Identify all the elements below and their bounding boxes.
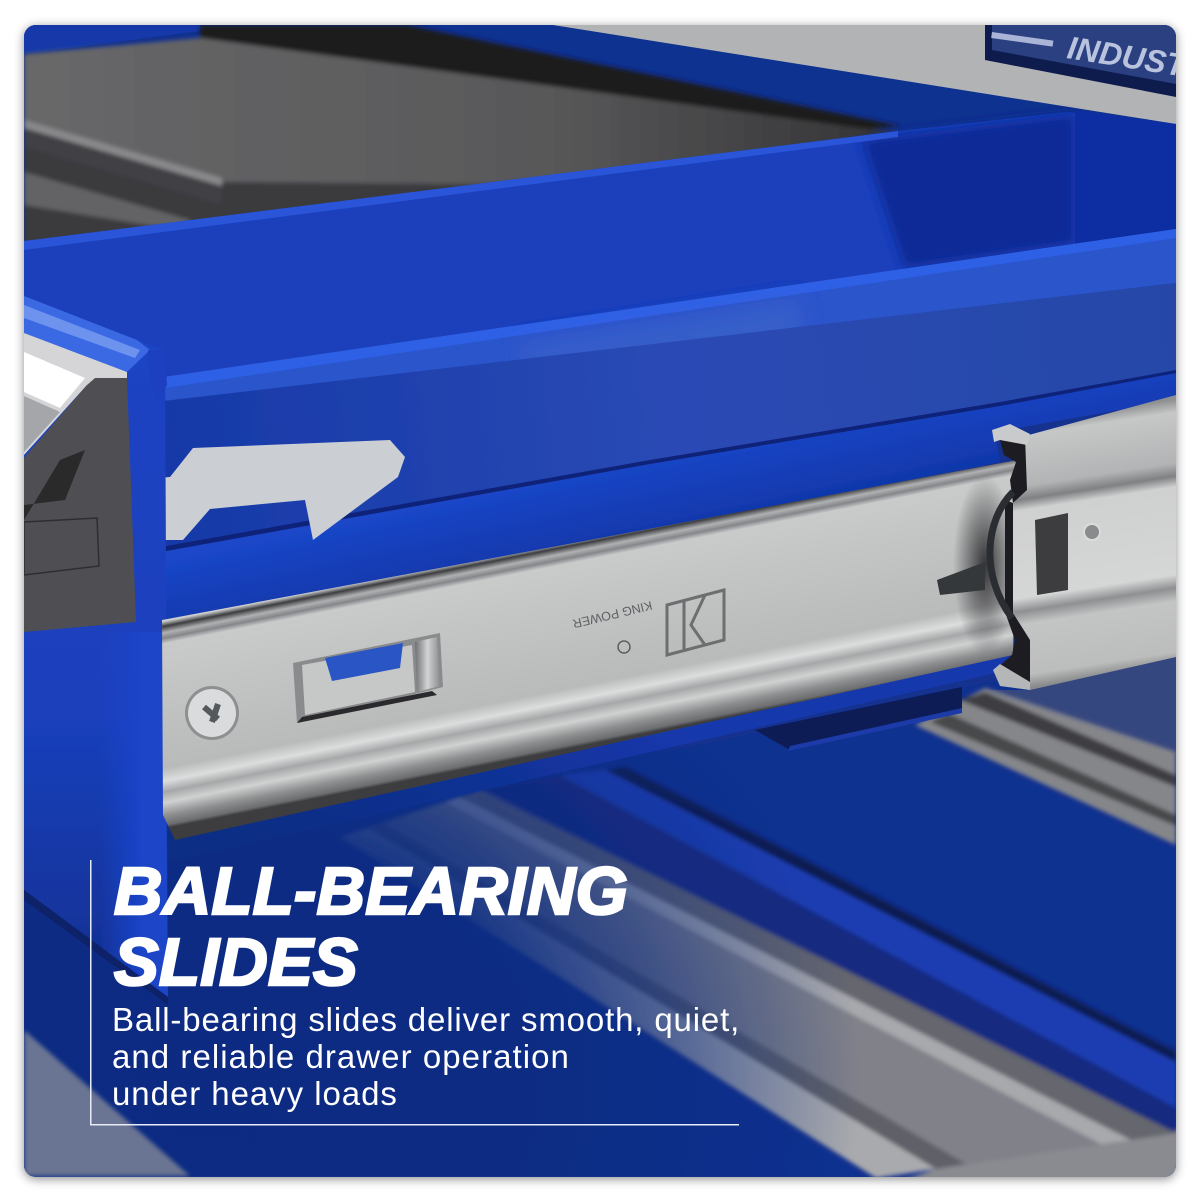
black handle bracket: [24, 378, 136, 632]
heading: BALL-BEARING: [114, 854, 628, 929]
clip bracket under slide: [755, 687, 962, 751]
cabinet grey front panel: [553, 25, 1176, 124]
screw on slide: [185, 686, 239, 740]
stamped slide logo: [571, 590, 724, 655]
drawer side panel: [155, 283, 1176, 625]
smudge near lever: [955, 480, 1008, 648]
silver latch bracket: [157, 440, 405, 540]
heading: [114, 854, 628, 1000]
black plastic release lever: [937, 492, 1013, 618]
lower background: dark blue tray: [24, 640, 1176, 1176]
grey rails lower right: [915, 688, 1176, 845]
badge: brand nameplate: [985, 25, 1191, 97]
stamped slide logo: KING POWER: [571, 598, 654, 631]
bottom-left grey rail: [24, 1030, 190, 1176]
drawer front panel left: [24, 296, 168, 1005]
blue strip under slide: [172, 656, 1012, 836]
body text: [112, 1001, 740, 1112]
text backdrop gradient: [24, 743, 842, 1176]
outer slide rail: [992, 395, 1176, 690]
slide inner rail: [162, 460, 1017, 840]
body text: under heavy loads: [112, 1075, 398, 1112]
rectangular slot tab: [293, 633, 443, 723]
body text: and reliable drawer operation: [112, 1038, 570, 1075]
badge: brand nameplate: INDUST: [1065, 29, 1191, 84]
chrome handle end: [24, 333, 127, 455]
drawer back wall: [24, 110, 1176, 380]
black latch window: [1035, 513, 1100, 595]
grey rails bottom: [340, 767, 1190, 1190]
top blue strip of cabinet: [24, 25, 1176, 135]
body text: Ball-bearing slides deliver smooth, quiet,: [112, 1001, 740, 1038]
heading: SLIDES: [114, 925, 358, 1000]
text frame lines: [90, 860, 739, 1126]
drawer rim: [164, 229, 1176, 402]
foam mat in drawer: [24, 25, 900, 250]
